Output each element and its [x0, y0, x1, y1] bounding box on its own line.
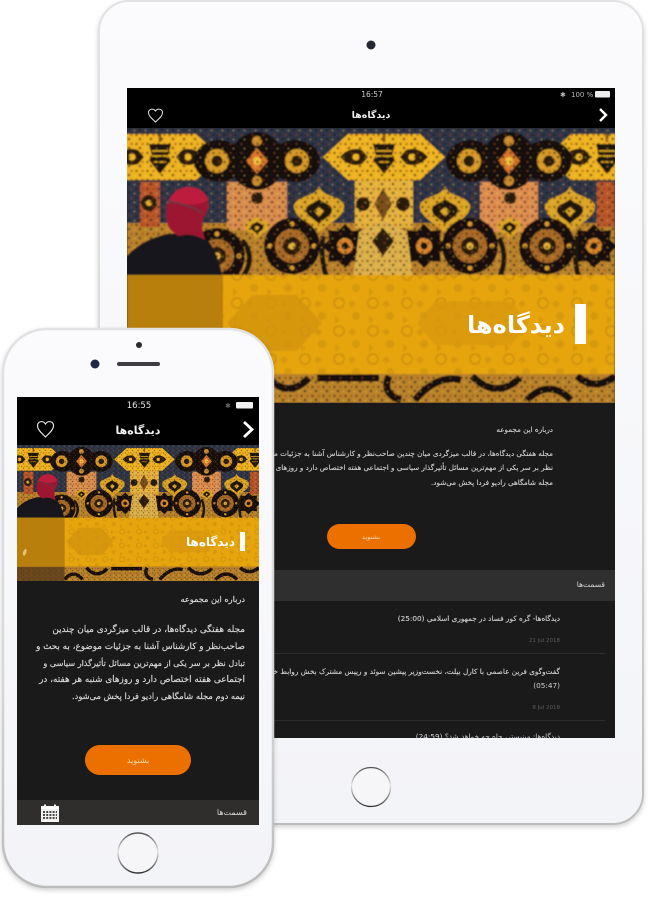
tablet about text: مجله شامگاهی رادیو فردا پخش می‌شود. — [431, 478, 553, 487]
tablet hero image — [127, 128, 615, 403]
tablet about text — [274, 426, 553, 487]
phone body — [3, 329, 273, 887]
phone about text: اجتماعی هفته اختصاص دارد و روزهای شنبه هر هفته، در — [38, 675, 245, 685]
tablet episodes bar — [274, 570, 615, 601]
tablet status and navigation bar: دیدگاه‌ها — [352, 109, 391, 121]
tablet episode list: 8 Jul 2018 — [532, 705, 560, 711]
tablet episode list: (05:47) — [533, 681, 560, 690]
tablet episode list: دیدگاه‌ها: مینیستر، چاه چه خواهد شد؟ (24:59) — [416, 732, 560, 741]
tablet listen button: بشنوید — [362, 533, 380, 541]
phone about text: تبادل نظر بر سر یکی از مهم‌ترین مسائل تأثیرگذار سیاسی و — [42, 657, 245, 668]
icon: calendar — [41, 804, 59, 822]
phone device — [3, 329, 285, 887]
phone home button — [118, 833, 158, 873]
phone status and navigation bar — [17, 397, 259, 445]
tablet device — [99, 1, 650, 824]
phone speaker — [117, 362, 160, 366]
phone about text: درباره این مجموعه — [180, 594, 245, 604]
tablet listen button — [327, 524, 416, 549]
icon: chevron — [600, 109, 606, 121]
phone about text: نیمه دوم مجله شامگاهی رادیو فردا پخش می‌شود. — [72, 691, 245, 701]
phone about text: مجله هفتگی دیدگاه‌ها، در قالب میزگردی میان چندین — [52, 624, 245, 635]
phone hero image — [17, 445, 259, 581]
phone status and navigation bar: دیدگاه‌ها — [116, 424, 161, 437]
tablet episode list — [274, 614, 605, 738]
tablet status and navigation bar: ✱ — [560, 91, 566, 99]
phone episodes bar — [17, 800, 259, 825]
tablet episode list: دیدگاه‌ها- گره کور فساد در جمهوری اسلامی (25:00) — [398, 614, 560, 623]
phone hero title — [186, 532, 245, 551]
tablet status and navigation bar: 16:57 — [361, 90, 383, 99]
phone listen button: بشنوید — [127, 756, 149, 765]
tablet episode list: گفت‌وگوی فرین عاصمی با کارل بیلت، نخست‌وزیر پیشین سوئد و رییس مشترک بخش روابط خارجی — [257, 667, 561, 676]
phone screen — [17, 397, 259, 825]
tablet status and navigation bar: 100 % — [571, 91, 594, 99]
phone about text — [35, 594, 245, 701]
tablet episode list: 21 Jul 2018 — [529, 638, 560, 644]
icon: heart — [148, 109, 162, 122]
tablet hero title — [467, 304, 586, 344]
tablet camera — [366, 40, 376, 50]
phone earpiece dot — [136, 342, 142, 348]
tablet home button — [352, 768, 390, 806]
tablet about text: نظر بر سر یکی از مهم‌ترین مسائل تأثیرگذار سیاسی و اجتماعی هفته اختصاص دارد و روزهای شنبه هر هفته، در نیمه دوم — [194, 462, 553, 472]
phone about text: صاحب‌نظر و کارشناس آشنا به جزئیات موضوع، به بحث و — [35, 640, 245, 652]
phone hero title: دیدگاه‌ها — [186, 535, 235, 549]
tablet episodes bar: قسمت‌ها — [577, 580, 605, 589]
phone episodes bar: قسمت‌ها — [217, 808, 247, 817]
tablet body — [99, 1, 643, 824]
icon: heart — [38, 422, 54, 437]
phone status and navigation bar: ✱ — [225, 402, 231, 410]
tablet status and navigation bar — [127, 88, 615, 128]
icon: chevron — [244, 422, 252, 437]
phone status and navigation bar: 16:55 — [127, 401, 151, 411]
phone listen button — [85, 745, 191, 775]
tablet about text: درباره این مجموعه — [496, 425, 553, 434]
phone front camera — [90, 360, 100, 368]
tablet about text: مجله هفتگی دیدگاه‌ها، در قالب میزگردی میان چندین صاحب‌نظر و کارشناس آشنا به جزئیات موضوع، به بحث و تبادل — [207, 448, 553, 458]
tablet screen — [127, 88, 615, 738]
tablet hero title: دیدگاه‌ها — [467, 311, 565, 339]
